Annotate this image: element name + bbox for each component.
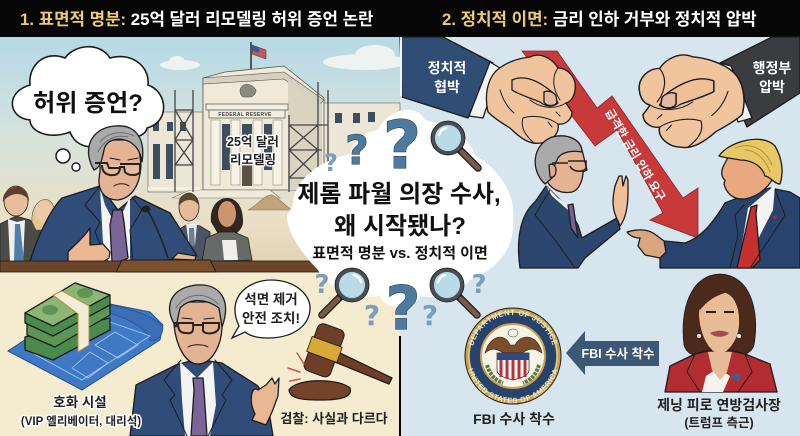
- arrow: FBI investigation: FBI 수사 착수: [581, 346, 655, 361]
- money stack: [25, 283, 110, 360]
- title: 제롬 파월 의장 수사,: [297, 181, 501, 208]
- blueprint: [8, 304, 163, 390]
- raised hand: [613, 176, 628, 226]
- character: Powell refusing: [519, 136, 628, 268]
- gavel: [288, 321, 392, 400]
- heading: panel 2: 2. 정치적 이면: 금리 인하 거부와 정치적 압박: [442, 10, 757, 29]
- character: Powell testifying: [30, 126, 197, 270]
- DOJ seal: DEPARTMENT OF JUSTICE: [468, 310, 558, 346]
- scaffolding left: [175, 90, 193, 192]
- paper band: [53, 291, 89, 352]
- arrow: FBI investigation: [566, 331, 659, 375]
- building label: [227, 135, 279, 167]
- speech bubble: asbestos: 석면 제거: [244, 292, 298, 307]
- question marks: ?: [324, 149, 338, 177]
- question marks: [314, 107, 487, 344]
- DOJ seal: UNITED STATES OF AMERICA: [468, 368, 558, 404]
- fist: [486, 55, 575, 143]
- flag: [250, 42, 266, 76]
- panel: surface pretext background: [0, 37, 400, 436]
- face: [545, 145, 587, 192]
- center divider: [399, 0, 402, 436]
- scaffolding right: [289, 82, 328, 192]
- thought bubble: 허위 증언?: 허위 증언?: [33, 90, 143, 117]
- glasses: [95, 163, 140, 175]
- building label: 리모델링: [230, 153, 276, 167]
- bystander: blonde woman: [32, 200, 55, 230]
- shield: [497, 353, 529, 380]
- desk and lectern: [0, 260, 400, 272]
- label: Pirro caption: 제닝 피로 연방검사장: [657, 397, 781, 413]
- speech bubble: asbestos: 안전 조치!: [242, 311, 300, 326]
- question marks: ?: [345, 128, 369, 174]
- arrow label: 급격한 금리 인하 요구: [602, 106, 669, 204]
- fist: [639, 55, 744, 148]
- hair: [89, 126, 143, 170]
- central white title blob: [287, 107, 513, 344]
- label: luxury facilities: (VIP 엘리베이터, 대리석): [21, 414, 141, 428]
- red falling arrow: [522, 51, 698, 238]
- label: Pirro caption: [657, 397, 781, 430]
- clouds in sky: [160, 45, 407, 70]
- question marks: ?: [386, 274, 420, 344]
- hand: [68, 228, 110, 268]
- question marks: ?: [471, 270, 487, 300]
- arm label: [753, 60, 791, 95]
- label: Pirro caption: (트럼프 측근): [684, 416, 754, 430]
- label: seal caption: FBI 수사 착수: [473, 411, 555, 427]
- building sign: FEDERAL RESERVE: [218, 112, 272, 118]
- face: [722, 150, 775, 199]
- thought bubble: 허위 증언?: [12, 47, 164, 171]
- Federal Reserve building: [148, 42, 400, 198]
- neck and face: [99, 140, 141, 200]
- impact marks: [288, 353, 304, 381]
- right arm and fist: [639, 37, 800, 148]
- arm label: 행정부: [753, 60, 791, 76]
- arm label: 정치적: [428, 60, 466, 76]
- hair: [170, 285, 226, 327]
- eagle: [485, 337, 542, 354]
- heading: panel 1: 1. 표면적 명분: 25억 달러 리모델링 허위 증언 논란: [20, 10, 373, 29]
- character: Trump pointing: [627, 139, 800, 268]
- glasses: [174, 323, 219, 333]
- eagle relief: [240, 84, 256, 97]
- sand pile: [248, 195, 292, 210]
- question marks: ?: [364, 299, 380, 332]
- question marks: ?: [422, 299, 438, 332]
- bystander: man right: [174, 193, 210, 262]
- left arm and fist: [400, 37, 575, 143]
- hair: [719, 139, 782, 184]
- face: [174, 302, 222, 364]
- character: Powell defending: [130, 285, 279, 436]
- title: 왜 시작됐나?: [334, 213, 466, 240]
- raised hand: [251, 378, 279, 425]
- magnifier lower right: [430, 268, 477, 315]
- arm label: [428, 60, 466, 95]
- label: prosecutors: 검찰: 사실과 다르다: [280, 411, 388, 426]
- subtitle: 표면적 명분 vs. 정치적 이면: [312, 245, 488, 262]
- suit: [30, 186, 197, 270]
- DOJ seal: [464, 308, 562, 404]
- character: Jeanine Pirro: [665, 274, 777, 392]
- bystander: dark-haired woman: [202, 198, 252, 262]
- arm label: 협박: [434, 79, 460, 95]
- title: [297, 181, 501, 262]
- magnifier top: [431, 121, 478, 168]
- bystander: man left: [0, 186, 44, 262]
- speech bubble: asbestos: [232, 280, 310, 338]
- panel: political background: [400, 37, 800, 436]
- building label: 25억 달러: [227, 135, 279, 149]
- label: luxury facilities: 호화 시설: [53, 395, 107, 410]
- arm label: 압박: [759, 79, 785, 95]
- microphone: [146, 208, 168, 258]
- pointing hand: [627, 230, 666, 258]
- question marks: ?: [383, 107, 421, 184]
- bystanders: [0, 186, 252, 262]
- question marks: ?: [314, 270, 330, 300]
- magnifier lower left: [322, 268, 369, 315]
- header bar: [0, 0, 800, 37]
- label: luxury facilities: [21, 395, 141, 428]
